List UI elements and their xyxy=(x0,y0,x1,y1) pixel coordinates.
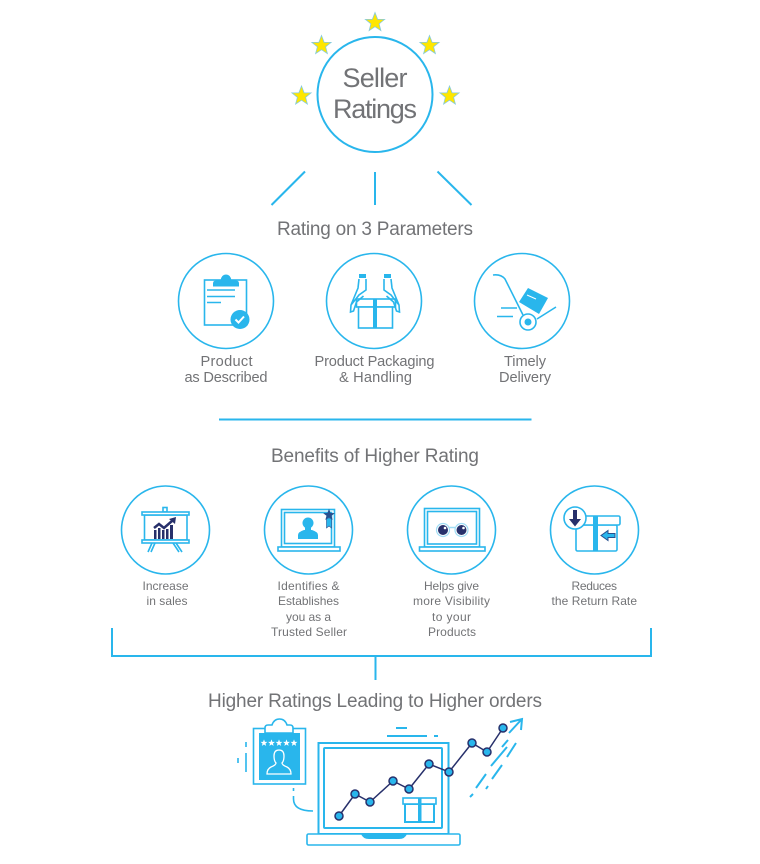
line chart xyxy=(335,724,507,820)
icon: gift box xyxy=(403,798,436,822)
icon: hand truck xyxy=(474,254,570,348)
label: to your xyxy=(432,610,471,624)
divider xyxy=(219,418,532,420)
benefit: more visibility xyxy=(408,486,496,639)
dashed connector xyxy=(294,788,313,811)
illustration: laptop with growth chart xyxy=(238,719,522,845)
icon: laptop with person and badge xyxy=(264,486,352,574)
badge title: Ratings xyxy=(333,94,417,124)
benefit: increase in sales xyxy=(122,486,210,608)
label: Timely xyxy=(504,354,547,370)
heading: rating on 3 parameters: Rating on 3 Parameters xyxy=(277,219,473,240)
side dashes xyxy=(238,742,246,772)
badge circle xyxy=(318,37,432,152)
icon: hands holding box xyxy=(326,254,422,348)
header: seller ratings badge xyxy=(292,12,459,152)
badge title: Seller xyxy=(342,63,408,93)
connector lines from badge xyxy=(272,172,472,205)
bracket connector xyxy=(112,628,651,680)
label xyxy=(552,579,637,608)
label: Product xyxy=(200,354,252,370)
label: more Visibility xyxy=(413,594,490,608)
motion dashes xyxy=(387,728,438,736)
label: Product Packaging xyxy=(314,354,434,370)
label xyxy=(271,579,347,639)
icon: box with return arrows xyxy=(550,486,638,574)
label: & Handling xyxy=(339,370,412,386)
label: Identifies & xyxy=(278,579,340,593)
benefit: trusted seller xyxy=(264,486,352,639)
label: Delivery xyxy=(499,370,552,386)
icon: presentation board chart xyxy=(122,486,210,574)
label xyxy=(314,354,434,386)
parameter: product as described xyxy=(178,254,274,386)
label: Increase xyxy=(142,579,189,593)
parameter: timely delivery xyxy=(474,254,570,386)
label xyxy=(413,579,490,639)
label xyxy=(142,579,189,608)
label: you as a xyxy=(286,610,331,624)
label xyxy=(184,354,268,386)
badge title xyxy=(333,63,417,124)
laptop xyxy=(307,743,460,845)
clipboard profile card xyxy=(254,719,306,784)
label xyxy=(499,354,552,386)
icon: clipboard with check xyxy=(178,254,274,348)
label: Trusted Seller xyxy=(271,625,347,639)
heading: higher ratings leading to higher orders: Higher Ratings Leading to Higher orders xyxy=(208,691,542,712)
label: Products xyxy=(428,625,476,639)
rating stars xyxy=(292,12,459,104)
benefit: reduces return rate xyxy=(550,486,638,608)
heading: benefits of higher rating: Benefits of Higher Rating xyxy=(271,446,479,467)
label: in sales xyxy=(146,594,188,608)
label: Establishes xyxy=(278,594,339,608)
parameter: product packaging and handling xyxy=(314,254,434,386)
icon: laptop with binoculars xyxy=(408,486,496,574)
label: Reduces xyxy=(572,579,617,593)
rising arrow xyxy=(470,719,522,797)
label: Helps give xyxy=(424,579,479,593)
label: the Return Rate xyxy=(552,594,637,608)
label: as Described xyxy=(184,370,268,386)
